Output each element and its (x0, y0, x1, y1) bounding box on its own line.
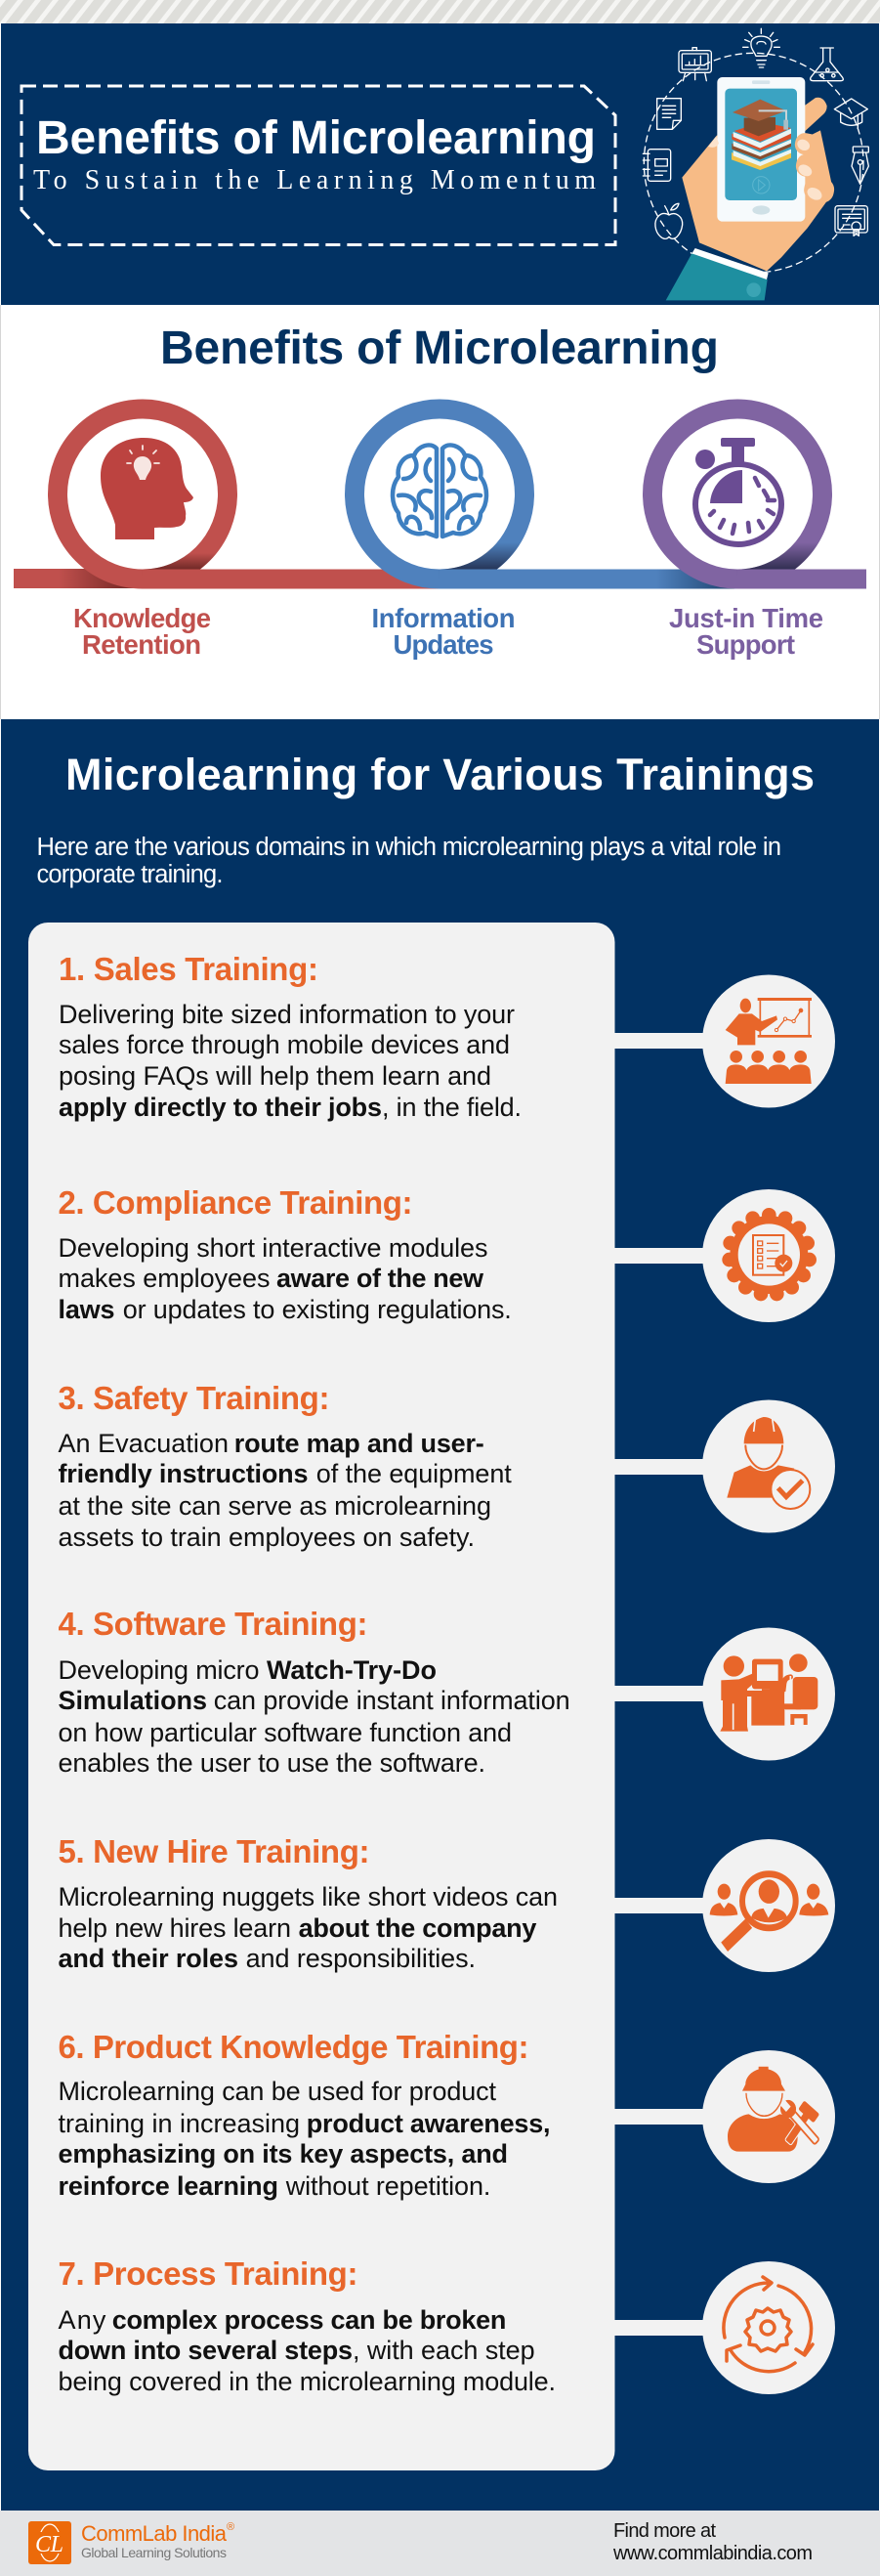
item 6: product knowledge training: emphasizing on its key aspects, and (59, 2139, 508, 2168)
item 3: safety training: 3. Safety Training: (59, 1380, 330, 1416)
title: Benefits of Microlearning (36, 112, 596, 164)
item 6: product knowledge training: Microlearning can be used for product (59, 2077, 496, 2106)
icon: pen nib (852, 147, 868, 184)
item 3: safety training: of the equipment (316, 1459, 512, 1488)
palm (682, 130, 833, 271)
text card (28, 923, 615, 2470)
dashed title frame (21, 86, 615, 244)
item 1: sales training: sales force through mobile devices and (59, 1030, 510, 1059)
panel: microlearning for various trainings (1, 719, 879, 2511)
panel: benefits of microlearning (0, 305, 880, 719)
item 7: process training: 7. Process Training: (59, 2255, 357, 2292)
item 5: new hire training: 5. New Hire Training: (59, 1833, 369, 1869)
phone (717, 77, 805, 222)
find more link text: www.commlabindia.com (612, 2543, 813, 2564)
icon: head with light bulb (101, 438, 193, 539)
label: knowledge retention: Knowledge (73, 603, 211, 633)
intro text: Here are the various domains in which microlearning plays a vital role in (37, 834, 781, 861)
icon circle: software training people at computer (702, 1628, 835, 1761)
item 5: new hire training (59, 1833, 558, 1973)
index finger (804, 98, 827, 132)
item 5: new hire training: Microlearning nuggets like short videos can (59, 1882, 558, 1911)
item 7: process training (59, 2255, 556, 2396)
icon circle: safety worker with check (702, 1399, 835, 1532)
item 1: sales training (59, 951, 522, 1122)
heading: Benefits of Microlearning (160, 322, 719, 374)
icon: document (657, 99, 681, 129)
item 5: new hire training: about the company (299, 1913, 536, 1943)
item 7: process training: Any (59, 2305, 106, 2335)
icon: notebook (643, 150, 671, 181)
item 2: compliance training: Developing short interactive modules (59, 1233, 488, 1263)
icon: brain (393, 445, 486, 537)
label: information updates: Information (371, 603, 516, 633)
icon circle: sales training presenter (702, 975, 835, 1108)
item 2: compliance training: or updates to existing regulations. (123, 1295, 512, 1324)
item 3: safety training: assets to train employees on safety. (59, 1523, 475, 1552)
item 7: process training: being covered in the microlearning module. (59, 2367, 556, 2396)
label: information updates (371, 603, 516, 660)
item 3: safety training: friendly instructions (59, 1459, 309, 1488)
item 6: product knowledge training: 6. Product Knowledge Training: (59, 2029, 529, 2065)
icon: flask (811, 48, 843, 81)
item 6: product knowledge training (59, 2029, 551, 2201)
item 6: product knowledge training: training in increasing (59, 2109, 300, 2138)
item 5: new hire training: help new hires learn (59, 1913, 291, 1943)
panel: hero banner (1, 23, 879, 305)
item 2: compliance training (59, 1184, 512, 1324)
item 2: compliance training: aware of the new (276, 1264, 484, 1293)
books and graduation cap (732, 100, 791, 170)
logo: CommLab India: Global Learning Solutions (81, 2545, 227, 2560)
item 4: software training: Developing micro (59, 1655, 260, 1685)
item 1: sales training: , in the field. (382, 1093, 522, 1122)
item 4: software training: can provide instant information (214, 1686, 570, 1715)
item 4: software training: 4. Software Training: (59, 1606, 367, 1642)
find more link text: Find more at (613, 2520, 716, 2542)
item 6: product knowledge training: product awareness, (307, 2109, 551, 2138)
item 1: sales training: Delivering bite sized information to your (59, 1000, 515, 1029)
icon circle: compliance gear with checklist (702, 1189, 835, 1322)
label: just-in time support (669, 603, 823, 660)
icon circle: new hire magnifier (702, 1839, 835, 1972)
item 2: compliance training: 2. Compliance Training: (59, 1184, 412, 1221)
intro text: corporate training. (37, 861, 223, 888)
item 3: safety training (59, 1380, 512, 1552)
item 7: process training: complex process can be broken (112, 2305, 506, 2335)
icon circle: product knowledge worker with tools (702, 2050, 835, 2183)
item 4: software training (59, 1606, 570, 1778)
item 5: new hire training: and their roles (59, 1944, 238, 1973)
icon: stopwatch (695, 438, 781, 544)
logo: CommLab India: CL (35, 2532, 63, 2557)
finger nails (708, 136, 824, 202)
timeline ribbon with rings (14, 408, 866, 588)
logo: CommLab India (28, 2521, 234, 2564)
shirt cuff and sleeve (666, 248, 769, 300)
logo: CommLab India: ® (227, 2521, 234, 2533)
item 2: compliance training: makes employees (59, 1264, 270, 1293)
label: just-in time support: Just-in Time (669, 603, 823, 633)
item 6: product knowledge training: reinforce learning (59, 2171, 278, 2201)
logo: CommLab India: CommLab India (81, 2521, 228, 2546)
item 4: software training: Watch-Try-Do (267, 1655, 437, 1685)
find more link text (612, 2520, 813, 2564)
item 2: compliance training: laws (59, 1295, 115, 1324)
item 1: sales training: apply directly to their jobs (59, 1093, 382, 1122)
icon: certificate (835, 206, 867, 236)
panel: footer (0, 2511, 880, 2576)
illustration: hand holding phone with learning icons (643, 28, 868, 300)
item 1: sales training: 1. Sales Training: (59, 951, 318, 987)
label: knowledge retention (73, 603, 211, 660)
label: just-in time support: Support (696, 629, 795, 660)
icon: apple (655, 203, 683, 238)
label: knowledge retention: Retention (82, 629, 201, 660)
icon circle: process cycle with gear (702, 2261, 835, 2394)
item 5: new hire training: and responsibilities. (246, 1944, 476, 1973)
item 4: software training: on how particular software function and (59, 1718, 512, 1747)
item 7: process training: , with each step (353, 2336, 535, 2365)
item 3: safety training: An Evacuation (59, 1429, 229, 1458)
intro text (37, 834, 781, 888)
top striped band (0, 0, 880, 23)
label: information updates: Updates (393, 629, 494, 660)
item 3: safety training: route map and user- (234, 1429, 484, 1458)
item 7: process training: down into several steps (59, 2336, 353, 2365)
item 6: product knowledge training: without repetition. (285, 2171, 490, 2201)
icon: light bulb (743, 28, 779, 67)
icon: presentation board (679, 48, 711, 81)
subtitle: To Sustain the Learning Momentum (33, 165, 596, 195)
connectors (610, 1033, 708, 2336)
item 4: software training: enables the user to use the software. (59, 1748, 485, 1778)
heading: Microlearning for Various Trainings (65, 750, 815, 799)
item 3: safety training: at the site can serve as microlearning (59, 1491, 491, 1521)
item 4: software training: Simulations (59, 1686, 207, 1715)
icon: graduation cap (834, 99, 867, 129)
item 1: sales training: posing FAQs will help them learn and (59, 1061, 491, 1091)
fingers (793, 131, 836, 205)
